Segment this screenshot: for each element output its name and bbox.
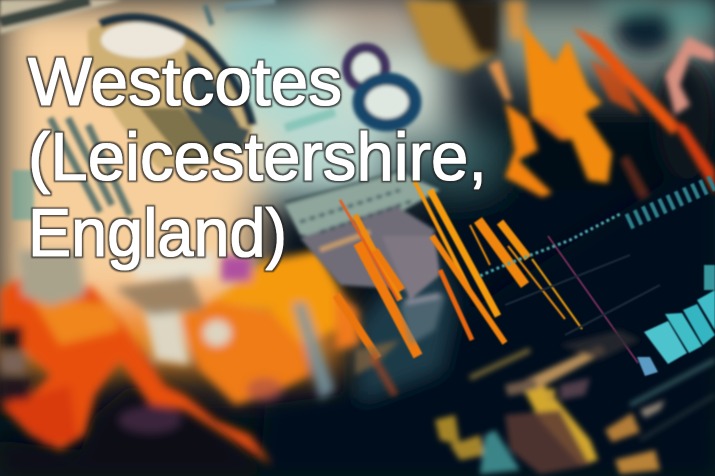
blurred brown chart top centre xyxy=(405,0,525,72)
sharp orange candlesticks in centre xyxy=(336,180,638,363)
orange candlestick chart, upper right xyxy=(488,23,715,200)
numeral 8 on banknote xyxy=(347,48,415,125)
title: (Leicestershire, xyxy=(28,119,487,195)
teal bar chart at right xyxy=(637,265,715,376)
sharper banknote details xyxy=(0,0,335,220)
title: Westcotes xyxy=(28,44,342,120)
teal data points and grid lines xyxy=(480,182,715,335)
bottom dashboard, blurred xyxy=(355,295,715,474)
title xyxy=(28,44,487,271)
blurred orange chart at lower left xyxy=(0,250,360,465)
banknote security strip xyxy=(285,170,440,300)
title: England) xyxy=(28,195,287,271)
